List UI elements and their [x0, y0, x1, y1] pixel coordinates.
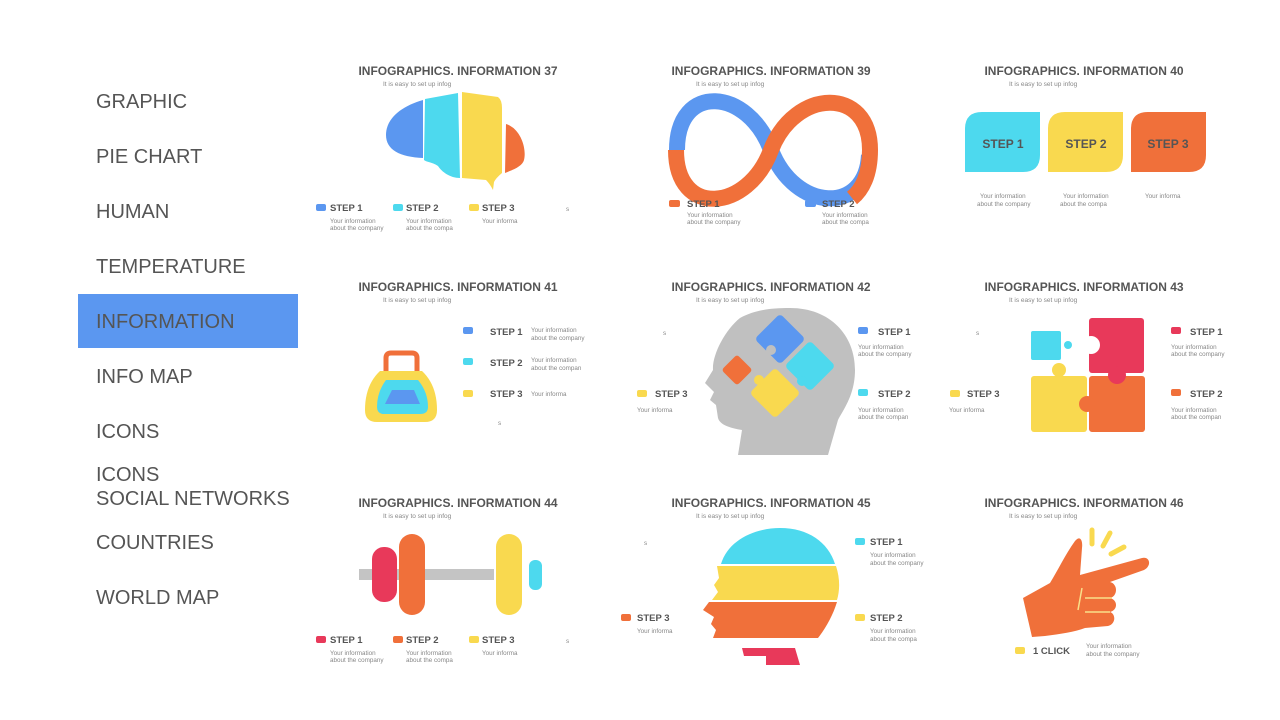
panel: information 44: INFOGRAPHICS. INFORMATION 44	[358, 496, 558, 510]
legend 44: s	[566, 638, 569, 645]
legend 42: Your informa	[637, 407, 673, 414]
legend 45	[621, 537, 924, 643]
sidebar menu: ICONS	[96, 421, 159, 443]
puzzle pieces	[1031, 318, 1145, 432]
legend 43: about the company	[1171, 351, 1225, 358]
panel: information 39: It is easy to set up infog	[696, 81, 765, 88]
head with puzzle	[705, 308, 855, 455]
leaf steps: STEP 2	[1065, 137, 1107, 151]
sidebar menu: HUMAN	[96, 201, 169, 223]
legend 42: about the compan	[858, 414, 909, 421]
legend 43	[949, 327, 1225, 421]
legend 39: Your information	[822, 212, 868, 219]
panel: information 46	[984, 496, 1184, 658]
panel: information 46: It is easy to set up infog	[1009, 513, 1078, 520]
panel: information 39	[669, 64, 871, 226]
panel: information 41	[358, 280, 585, 427]
legend 41: Your information	[531, 357, 577, 364]
legend 45: STEP 1	[870, 537, 903, 548]
panel: information 40	[965, 64, 1206, 208]
legend 46: about the company	[1086, 651, 1140, 658]
legend 41: Your information	[531, 327, 577, 334]
legend 42: STEP 1	[878, 327, 911, 338]
legend 37: Your informa	[482, 218, 518, 225]
legend 43: Your information	[1171, 407, 1217, 414]
legend 43: STEP 3	[967, 389, 1000, 400]
panel: information 40: INFOGRAPHICS. INFORMATION 40	[984, 64, 1184, 78]
legend 41: STEP 1	[490, 327, 523, 338]
legend 41	[463, 327, 585, 427]
dumbbell	[359, 534, 542, 615]
legend 41: about the company	[531, 335, 585, 342]
legend 39	[669, 199, 869, 226]
panel: information 44: It is easy to set up infog	[383, 513, 452, 520]
legend 41: STEP 2	[490, 358, 523, 369]
legend 44: about the company	[330, 657, 384, 664]
legend 45: about the company	[870, 560, 924, 567]
leaf steps: about the company	[977, 201, 1031, 208]
legend 43: Your information	[1171, 344, 1217, 351]
leaf steps	[965, 112, 1206, 208]
legend 45: STEP 3	[637, 613, 670, 624]
sidebar menu: SOCIAL NETWORKS	[96, 488, 290, 510]
legend 41: s	[498, 420, 501, 427]
sidebar menu: TEMPERATURE	[96, 256, 246, 278]
legend 39: about the compa	[822, 219, 869, 226]
panel: information 40: It is easy to set up infog	[1009, 81, 1078, 88]
legend 39: STEP 2	[822, 199, 855, 210]
panel: information 45	[621, 496, 924, 665]
legend 37: STEP 1	[330, 203, 363, 214]
legend 37: about the company	[330, 225, 384, 232]
legend 43: STEP 1	[1190, 327, 1223, 338]
legend 45: about the compa	[870, 636, 917, 643]
legend 44: STEP 1	[330, 635, 363, 646]
legend 44: Your informa	[482, 650, 518, 657]
legend 45: Your information	[870, 628, 916, 635]
panel: information 42: It is easy to set up infog	[696, 297, 765, 304]
legend 39: Your information	[687, 212, 733, 219]
sidebar menu: PIE CHART	[96, 146, 202, 168]
panel: information 37: It is easy to set up infog	[383, 81, 452, 88]
legend 45: Your informa	[637, 628, 673, 635]
infinity chart	[676, 101, 870, 199]
sidebar menu: INFO MAP	[96, 366, 193, 388]
panel: information 43: It is easy to set up infog	[1009, 297, 1078, 304]
leaf steps: Your information	[1063, 193, 1109, 200]
legend 42: Your information	[858, 407, 904, 414]
panel: information 37: INFOGRAPHICS. INFORMATION 37	[358, 64, 558, 78]
legend 41: about the compan	[531, 365, 582, 372]
legend 46	[1015, 643, 1140, 658]
legend 46: Your information	[1086, 643, 1132, 650]
leaf steps: Your information	[980, 193, 1026, 200]
legend 43: Your informa	[949, 407, 985, 414]
sidebar menu: WORLD MAP	[96, 587, 219, 609]
legend 44: STEP 2	[406, 635, 439, 646]
panel: information 44	[316, 496, 569, 664]
legend 37: s	[566, 206, 569, 213]
legend 45: Your information	[870, 552, 916, 559]
legend 37: STEP 2	[406, 203, 439, 214]
legend 43: s	[976, 330, 979, 337]
legend 37: about the compa	[406, 225, 453, 232]
panel: information 43	[949, 280, 1225, 432]
panel: information 41: It is easy to set up infog	[383, 297, 452, 304]
panel: information 41: INFOGRAPHICS. INFORMATION 41	[358, 280, 558, 294]
legend 46: 1 CLICK	[1033, 646, 1070, 657]
legend 37: Your information	[330, 218, 376, 225]
legend 42: s	[663, 330, 666, 337]
leaf steps: about the compa	[1060, 201, 1107, 208]
sidebar menu: ICONS	[96, 464, 159, 486]
legend 43: STEP 2	[1190, 389, 1223, 400]
legend 42: STEP 3	[655, 389, 688, 400]
panel: information 42: INFOGRAPHICS. INFORMATION 42	[671, 280, 871, 294]
legend 42: about the company	[858, 351, 912, 358]
sidebar menu: INFORMATION	[96, 311, 235, 333]
legend 37	[316, 203, 569, 232]
panel: information 46: INFOGRAPHICS. INFORMATION 46	[984, 496, 1184, 510]
brain chart	[386, 92, 525, 190]
legend 45: STEP 2	[870, 613, 903, 624]
panel: information 39: INFOGRAPHICS. INFORMATION 39	[671, 64, 871, 78]
legend 42: STEP 2	[878, 389, 911, 400]
legend 44: Your information	[330, 650, 376, 657]
legend 42	[637, 327, 912, 421]
panel: information 42	[637, 280, 912, 455]
panel: information 37	[316, 64, 569, 232]
legend 39: STEP 1	[687, 199, 720, 210]
icon: pointing hand	[1023, 530, 1149, 637]
legend 44: Your information	[406, 650, 452, 657]
legend 45: s	[644, 540, 647, 547]
leaf steps: STEP 1	[982, 137, 1024, 151]
sidebar menu: GRAPHIC	[96, 91, 187, 113]
sidebar menu	[78, 91, 298, 609]
legend 44: STEP 3	[482, 635, 515, 646]
legend 39: about the company	[687, 219, 741, 226]
legend 43: about the compan	[1171, 414, 1222, 421]
layered head	[703, 528, 839, 665]
leaf steps: STEP 3	[1147, 137, 1189, 151]
legend 44	[316, 635, 569, 664]
legend 41: STEP 3	[490, 389, 523, 400]
legend 41: Your informa	[531, 391, 567, 398]
legend 42: Your information	[858, 344, 904, 351]
panel: information 45: It is easy to set up infog	[696, 513, 765, 520]
legend 37: STEP 3	[482, 203, 515, 214]
sidebar menu: COUNTRIES	[96, 532, 214, 554]
panel: information 45: INFOGRAPHICS. INFORMATION 45	[671, 496, 871, 510]
leaf steps: Your informa	[1145, 193, 1181, 200]
legend 44: about the compa	[406, 657, 453, 664]
icon: bag	[365, 353, 437, 422]
legend 37: Your information	[406, 218, 452, 225]
panel: information 43: INFOGRAPHICS. INFORMATION 43	[984, 280, 1184, 294]
